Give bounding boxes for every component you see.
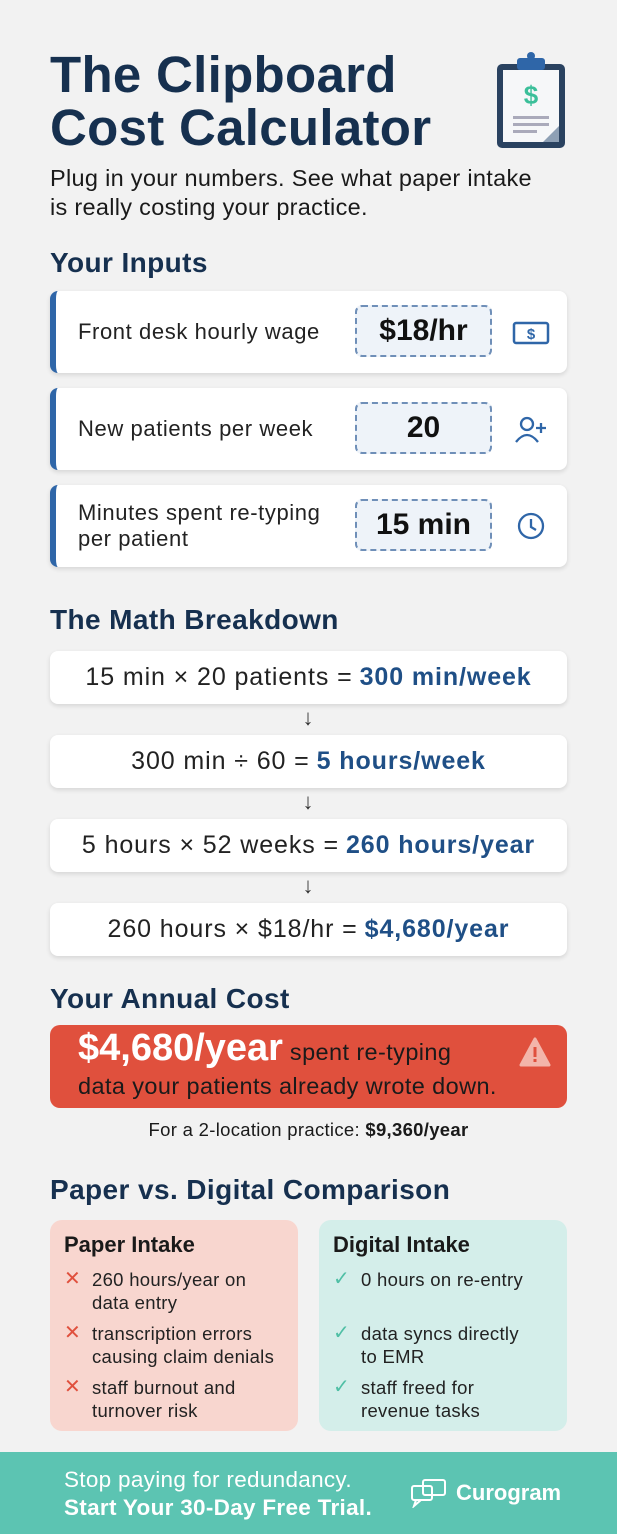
- callout: annual cost: data your patients already wrote down.: [78, 1073, 497, 1099]
- icon: money: $: [527, 326, 536, 343]
- panel: paper intake: staff burnout and: [92, 1377, 236, 1398]
- arrow: ↓: [302, 873, 314, 898]
- callout: annual cost: [50, 1025, 567, 1108]
- input card: minutes: per patient: [78, 526, 189, 551]
- panel: paper intake: turnover risk: [92, 1400, 198, 1421]
- logo: Curogram: Curogram: [456, 1480, 561, 1505]
- panel: digital intake: [319, 1220, 567, 1431]
- logo: Curogram: [411, 1479, 561, 1508]
- title: The Clipboard: [50, 46, 397, 103]
- icon: warning: [520, 1037, 550, 1066]
- input card: patients: [50, 388, 567, 470]
- input card: wage: Front desk hourly wage: [78, 319, 320, 344]
- panel: paper intake: [50, 1220, 298, 1431]
- footer CTA: Start Your 30-Day Free Trial.: [64, 1495, 372, 1520]
- math step 3: 260 hours/year: [346, 831, 535, 859]
- panel: paper intake: transcription errors: [92, 1323, 252, 1344]
- panel: digital intake: data syncs directly: [361, 1323, 519, 1344]
- panel: digital intake: ✓: [333, 1376, 350, 1398]
- panel: digital intake: ✓: [333, 1268, 350, 1290]
- math step 3: [50, 819, 567, 872]
- input card: minutes: [50, 485, 567, 567]
- math step 1: [50, 651, 567, 704]
- panel: digital intake: ✓: [333, 1322, 350, 1344]
- heading: comparison: Paper vs. Digital Comparison: [50, 1174, 450, 1205]
- icon: clipboard: $: [524, 80, 539, 110]
- input card: minutes: 15 min: [376, 508, 471, 541]
- arrow: ↓: [302, 705, 314, 730]
- subtitle: is really costing your practice.: [50, 194, 368, 220]
- heading: Your Inputs: Your Inputs: [50, 247, 208, 278]
- footer CTA: [0, 1452, 617, 1534]
- math step 4: [50, 903, 567, 956]
- heading: math: The Math Breakdown: [50, 604, 339, 635]
- panel: paper intake: ✕: [64, 1268, 81, 1290]
- input card: patients: New patients per week: [78, 416, 313, 441]
- math step 2: 5 hours/week: [317, 747, 486, 775]
- input card: wage: $18/hr: [379, 314, 468, 347]
- input card: patients: 20: [407, 411, 440, 444]
- panel: digital intake: staff freed for: [361, 1377, 474, 1398]
- math step 1: 15 min × 20 patients =: [85, 663, 353, 691]
- title: Cost Calculator: [50, 99, 431, 156]
- note: 2-location: For a 2-location practice: $9,360/year: [149, 1119, 468, 1140]
- panel: digital intake: revenue tasks: [361, 1400, 480, 1421]
- math step 2: 300 min ÷ 60 =: [131, 747, 310, 775]
- icon: clock: [518, 512, 544, 540]
- panel: paper intake: data entry: [92, 1292, 177, 1313]
- panel: digital intake: to EMR: [361, 1346, 424, 1367]
- subtitle: Plug in your numbers. See what paper intake: [50, 165, 532, 191]
- icon: clipboard: [497, 52, 565, 148]
- math step 4: 260 hours × $18/hr =: [108, 915, 358, 943]
- panel: digital intake: Digital Intake: [333, 1232, 470, 1257]
- panel: paper intake: causing claim denials: [92, 1346, 274, 1367]
- heading: annual cost: Your Annual Cost: [50, 983, 290, 1014]
- panel: paper intake: 260 hours/year on: [92, 1269, 246, 1290]
- callout: annual cost: $4,680/year spent re-typing: [78, 1027, 451, 1069]
- icon: money: [512, 322, 550, 344]
- math step 3: 5 hours × 52 weeks =: [82, 831, 339, 859]
- subtitle: [50, 165, 532, 220]
- input card: minutes: Minutes spent re-typing: [78, 500, 320, 525]
- arrow: ↓: [302, 789, 314, 814]
- input card: wage: [50, 291, 567, 373]
- icon: add user: [515, 416, 546, 443]
- math step 4: $4,680/year: [365, 915, 509, 943]
- panel: digital intake: 0 hours on re-entry: [361, 1269, 523, 1290]
- math step 2: [50, 735, 567, 788]
- panel: paper intake: Paper Intake: [64, 1232, 195, 1257]
- footer CTA: Stop paying for redundancy.: [64, 1467, 352, 1492]
- title: [50, 46, 431, 156]
- math step 1: 300 min/week: [360, 663, 532, 691]
- panel: paper intake: ✕: [64, 1376, 81, 1398]
- panel: paper intake: ✕: [64, 1322, 81, 1344]
